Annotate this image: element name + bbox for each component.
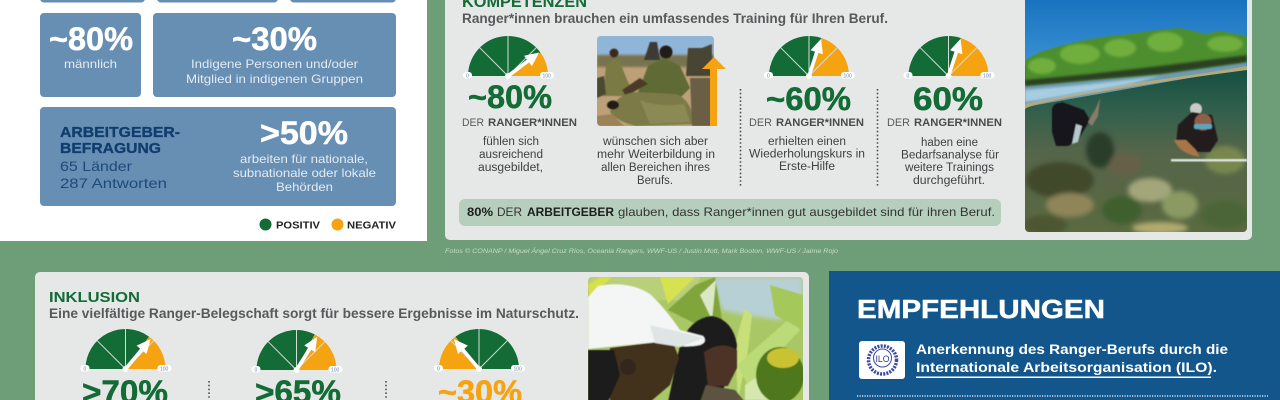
icon: ILO logo: ILO xyxy=(876,354,890,364)
stat box: employer survey: BEFRAGUNG xyxy=(60,141,161,157)
stat: 60 percent needs analysis: DER xyxy=(887,117,910,129)
stat: 80 percent feel well trained: fühlen sich xyxy=(483,136,539,148)
stat box: indigenous share: Mitglied in indigenen Gruppen xyxy=(186,72,363,86)
gauge: above 65 percent: 100 xyxy=(331,367,340,373)
photo: two women among banana plants xyxy=(588,277,804,400)
text: want more training: wünschen sich aber xyxy=(602,136,708,148)
callout: employers: DER xyxy=(497,205,522,219)
stat: 80 percent feel well trained xyxy=(462,79,577,174)
stat: 60 percent needs analysis xyxy=(887,81,1002,187)
gauge: above 70 percent: 100 xyxy=(160,366,169,372)
stat: 60 percent first aid refresher: RANGER*INNEN xyxy=(776,117,864,129)
panel: demographics xyxy=(0,0,427,241)
photo: rangers training xyxy=(597,36,714,126)
legend: NEGATIV xyxy=(347,220,396,232)
text: want more training: allen Bereichen ihres xyxy=(601,162,710,174)
gauge: above 70 percent: 0 xyxy=(84,366,86,372)
stat: 60 percent needs analysis: weitere Trainings xyxy=(904,162,994,174)
text: want more training: Berufs. xyxy=(637,175,673,187)
gauge: 60 percent first aid: 0 xyxy=(767,73,770,79)
heading: INKLUSION xyxy=(49,290,140,306)
icon: ILO logo xyxy=(859,341,905,379)
stat: 60 percent first aid refresher: Wiederholungskurs in xyxy=(749,148,865,160)
stat box: male share: ~80% xyxy=(49,21,133,57)
callout: employers: ARBEITGEBER xyxy=(527,205,614,219)
top row boxes xyxy=(40,0,396,2)
stat box: indigenous share: ~30% xyxy=(232,21,317,57)
stat: 60 percent first aid refresher xyxy=(749,81,865,173)
callout: employers: glauben, dass Ranger*innen gut ausgebildet sind für ihren Beruf. xyxy=(618,205,995,219)
stat: 60 percent first aid refresher: ~60% xyxy=(766,81,851,117)
photo credit: Fotos © CONANP / Miguel Ángel Cruz Ríos, Oceania Rangers, WWF-US / Justin Mott, Mark Booton, WWF-US / Jaime Rojo xyxy=(445,246,838,255)
gauge: 60 percent needs analysis: 100 xyxy=(983,73,992,79)
gauge: 80 percent: 0 xyxy=(466,73,469,79)
subheading: Ranger*innen brauchen ein umfassendes Training für Ihren Beruf. xyxy=(462,11,888,26)
gauge: 80 percent xyxy=(463,36,554,81)
stat: 60 percent needs analysis: 60% xyxy=(913,81,983,117)
stat box: employer survey: arbeiten für nationale, xyxy=(240,152,368,166)
stat box: employer survey: Behörden xyxy=(276,180,333,194)
stat: 60 percent needs analysis: RANGER*INNEN xyxy=(914,117,1002,129)
arrow: upward orange xyxy=(702,57,726,126)
gauge: 60 percent needs analysis: 0 xyxy=(906,73,910,79)
gauge: 60 percent needs analysis xyxy=(904,36,994,79)
panel: Kompetenzen xyxy=(445,0,1252,255)
stat: 80 percent feel well trained: ausgebildet, xyxy=(478,162,543,174)
stat box: employer survey: subnationale oder lokale xyxy=(233,166,376,180)
gauge: 80 percent: 100 xyxy=(542,73,551,79)
stat: 60 percent needs analysis: durchgeführt. xyxy=(913,175,985,187)
panel: Empfehlungen xyxy=(829,271,1280,400)
stat box: male share: männlich xyxy=(64,57,117,71)
gauge: 60 percent first aid xyxy=(764,36,855,79)
stat box: employer survey: 287 Antworten xyxy=(60,175,167,191)
stat box: employer survey: >50% xyxy=(260,115,348,151)
stat box: indigenous share: Indigene Personen und/oder xyxy=(191,57,358,71)
gauge: about 30 percent xyxy=(434,329,525,373)
stat: 80 percent feel well trained: ausreichend xyxy=(479,149,543,161)
gauge: about 30 percent: 0 xyxy=(437,366,440,372)
stat: 80 percent feel well trained: ~80% xyxy=(468,79,552,115)
stat box: employer survey: 65 Länder xyxy=(60,158,132,174)
photo: divers in mangrove shallows xyxy=(1023,0,1249,236)
stat: 80 percent feel well trained: DER xyxy=(462,117,484,129)
text: want more training: mehr Weiterbildung in xyxy=(597,149,715,161)
recommendation text: Anerkennung des Ranger-Berufs durch die xyxy=(916,341,1228,357)
stat: 60 percent first aid refresher: DER xyxy=(749,117,772,129)
gauge: above 70 percent xyxy=(80,329,172,373)
gauge: above 65 percent: 0 xyxy=(254,367,258,373)
stat: 60 percent needs analysis: haben eine xyxy=(921,137,978,149)
gauge: above 65 percent xyxy=(252,330,342,373)
panel: Inklusion xyxy=(35,272,809,400)
stat: 60 percent first aid refresher: Erste-Hilfe xyxy=(779,161,835,173)
callout: employers: 80% xyxy=(467,205,493,219)
heading: EMPFEHLUNGEN xyxy=(857,294,1105,324)
recommendation text xyxy=(916,341,1228,378)
recommendation text: Internationale Arbeitsorganisation (ILO). xyxy=(916,359,1217,375)
gauge: about 30 percent: 100 xyxy=(514,366,522,372)
stat: 60 percent needs analysis: Bedarfsanalyse für xyxy=(901,150,999,162)
stat: 60 percent first aid refresher: erhielten einen xyxy=(768,136,846,148)
stat box: male share xyxy=(40,13,141,97)
gauge: 60 percent first aid: 100 xyxy=(844,73,852,79)
stat box: indigenous share xyxy=(153,13,396,97)
callout: employers xyxy=(459,199,1001,226)
text: want more training xyxy=(597,136,715,187)
stat box: employer survey: ARBEITGEBER- xyxy=(60,125,180,141)
subheading: Eine vielfältige Ranger-Belegschaft sorgt für bessere Ergebnisse im Naturschutz. xyxy=(49,306,579,321)
stat: 80 percent feel well trained: RANGER*INNEN xyxy=(488,117,577,129)
stat box: employer survey xyxy=(40,107,396,206)
legend: POSITIV xyxy=(276,220,320,232)
legend xyxy=(260,218,396,232)
